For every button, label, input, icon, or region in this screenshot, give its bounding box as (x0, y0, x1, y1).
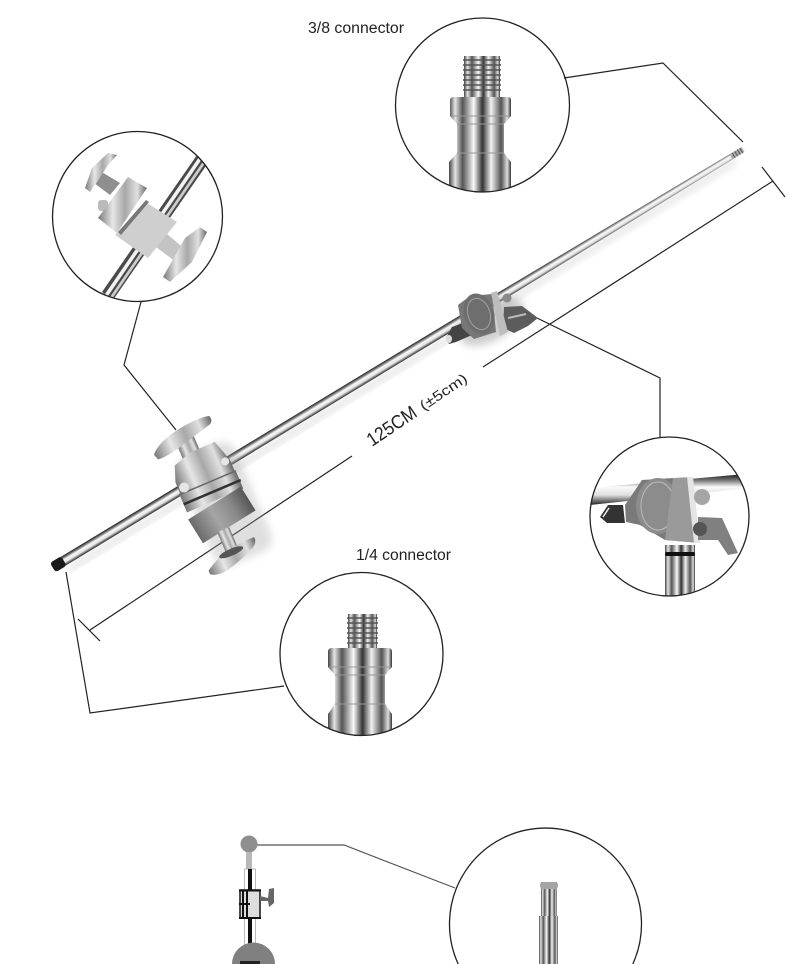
clamp block close-up (98, 177, 147, 233)
pole close-up (665, 545, 695, 600)
stand tube (244, 869, 256, 963)
bottom knob (196, 520, 262, 578)
1/4 spigot body (328, 648, 392, 736)
stand lever (260, 888, 274, 907)
main boom rod (50, 145, 749, 578)
small side stud (98, 200, 108, 211)
circle: 3/8 connector detail (396, 18, 570, 192)
label: 125CM length: 125CM (363, 402, 421, 451)
label: 125CM length (363, 368, 472, 451)
swivel disc (458, 289, 500, 339)
highlighted top pin (240, 836, 258, 852)
lever close-up (698, 517, 738, 555)
swivel housing close-up (625, 478, 700, 543)
swivel lower hook (446, 322, 472, 344)
lower hook close-up (600, 505, 625, 523)
clamp rod close-up (102, 155, 208, 300)
circle: swivel detail (590, 437, 750, 600)
swivel collar (458, 294, 496, 339)
stand silhouette (232, 836, 275, 964)
top knob (148, 414, 223, 473)
rod close-up (590, 474, 750, 505)
right knob close-up (163, 227, 207, 282)
label: 1/4 connector: 1/4 connector (356, 547, 451, 564)
clamp cylinder close-up (115, 203, 177, 258)
label: 125CM length: (±5cm) (416, 370, 470, 413)
1/4 spigot thread (348, 614, 377, 650)
clamp body (166, 438, 244, 512)
swivel plate (491, 291, 508, 336)
circle: 1/4 connector detail (280, 572, 443, 736)
swivel lever (503, 306, 538, 333)
circle: stud detail (450, 828, 642, 964)
main clamp head (148, 410, 278, 580)
stand base highlight (232, 942, 275, 964)
mid swivel clamp (446, 288, 538, 356)
stud top (541, 882, 557, 917)
stud shaft (539, 916, 558, 964)
upper knob close-up (85, 153, 117, 192)
clamp lower stem (156, 234, 181, 260)
dimension line: 125CM (78, 167, 785, 641)
leader lines (66, 63, 743, 713)
swivel shadow (452, 288, 532, 356)
clamp block (188, 487, 256, 543)
3/8 spigot thread (464, 56, 500, 98)
stand collar (239, 890, 261, 918)
clamp shadow (173, 438, 276, 570)
stand leader line (257, 845, 455, 888)
circle: clamp detail (52, 132, 222, 302)
label: 3/8 connector: 3/8 connector (308, 20, 404, 37)
upper stem (96, 172, 120, 195)
3/8 spigot body (449, 97, 511, 192)
